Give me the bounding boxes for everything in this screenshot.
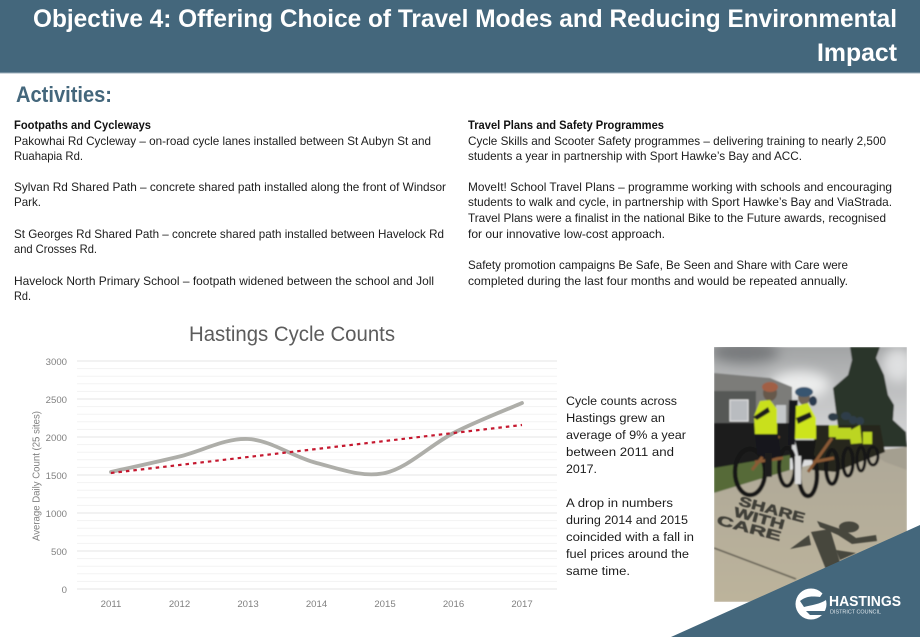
logo wordmark: DISTRICT COUNCIL — [830, 610, 881, 616]
text block: cycle count commentary: A drop in numbers — [566, 496, 673, 510]
y axis labels: 1000 — [46, 509, 67, 520]
tree — [833, 347, 907, 447]
y axis labels: 2000 — [46, 433, 67, 444]
text block: footpaths and cycleways: Rd. — [14, 290, 31, 303]
road marking: share with care — [717, 496, 806, 542]
x axis labels: 2012 — [169, 599, 190, 610]
heading: activities: Activities: — [16, 82, 112, 107]
icon: Hastings logo mark — [796, 588, 827, 620]
header banner — [0, 0, 920, 74]
road marking: share with care: WITH — [732, 504, 786, 532]
text block: travel plans and safety programmes: Travel Plans and Safety Programmes — [468, 119, 664, 132]
text block: footpaths and cycleways: Sylvan Rd Shared Path – concrete shared path installed along the front of Windsor — [14, 181, 446, 194]
text block: footpaths and cycleways: and Crosses Rd. — [14, 243, 97, 256]
text block: cycle count commentary: average of 9% a year — [566, 428, 686, 442]
title: Objective 4: Offering Choice of Travel Modes and Reducing Environmental — [33, 5, 897, 33]
x axis labels: 2015 — [374, 599, 396, 610]
y axis title: Average Daily Count (25 sites) — [32, 411, 42, 541]
y axis labels — [46, 357, 67, 596]
x axis labels: 2016 — [443, 599, 464, 610]
text block: footpaths and cycleways: Pakowhai Rd Cycleway – on-road cycle lanes installed between St Aubyn St and — [14, 135, 431, 148]
title — [33, 5, 898, 67]
y axis labels: 1500 — [46, 471, 67, 482]
text block: cycle count commentary: during 2014 and 2015 — [566, 513, 688, 527]
bikes — [735, 447, 878, 496]
road marking: cyclist symbol — [790, 521, 877, 572]
text block: travel plans and safety programmes: Safety promotion campaigns Be Safe, Be Seen and Share with Care were — [468, 259, 848, 272]
y axis labels: 3000 — [46, 357, 67, 368]
text block: cycle count commentary — [566, 394, 694, 578]
text block: footpaths and cycleways: Footpaths and Cycleways — [14, 119, 151, 132]
text block: travel plans and safety programmes: students a year in partnership with Sport Hawke’s Bay and ACC. — [468, 150, 802, 163]
text block: cycle count commentary: same time. — [566, 564, 630, 578]
corner triangle with logo — [671, 525, 920, 637]
text block: travel plans and safety programmes: completed during the last four months and would be repeated annually. — [468, 275, 848, 288]
text block: cycle count commentary: between 2011 and — [566, 445, 674, 459]
text block: travel plans and safety programmes: MoveIt! School Travel Plans – programme working with schools and encouraging — [468, 181, 892, 194]
line chart: Hastings cycle counts — [32, 323, 557, 610]
text block: cycle count commentary: Hastings grew an — [566, 411, 665, 425]
title: Impact — [817, 39, 898, 67]
text block: footpaths and cycleways: St Georges Rd Shared Path – concrete shared path installed between Havelock Rd — [14, 228, 444, 241]
chart title: Hastings Cycle Counts — [189, 323, 395, 346]
text block: travel plans and safety programmes: Cycle Skills and Scooter Safety programmes – delivering training to nearly 2,500 — [468, 135, 886, 148]
students — [760, 434, 780, 460]
text block: footpaths and cycleways — [14, 119, 446, 303]
distant students — [829, 425, 872, 444]
text block: footpaths and cycleways: Ruahapia Rd. — [14, 150, 83, 163]
road marking: share with care: CARE — [715, 512, 783, 544]
text block: footpaths and cycleways: Park. — [14, 196, 41, 209]
photo: students with bikes on shared path — [711, 341, 914, 602]
road marking: share with care: SHARE — [737, 493, 807, 525]
text block: footpaths and cycleways: Havelock North Primary School – footpath widened between the school and Joll — [14, 275, 434, 288]
clouds — [711, 341, 914, 399]
text block: travel plans and safety programmes: students to walk and cycle, in partnership with Sport Hawke’s Bay and ViaStrada. — [468, 196, 892, 209]
text block: travel plans and safety programmes — [468, 119, 892, 288]
trend line — [111, 425, 522, 473]
x axis labels: 2014 — [306, 599, 328, 610]
logo wordmark: HASTINGS — [829, 594, 901, 610]
y axis labels: 500 — [51, 547, 67, 558]
text block: cycle count commentary: coincided with a fall in — [566, 530, 694, 544]
text block: cycle count commentary: 2017. — [566, 462, 597, 476]
text block: cycle count commentary: Cycle counts across — [566, 394, 677, 408]
x axis labels — [101, 599, 533, 610]
cycle count line — [111, 403, 522, 474]
x axis labels: 2013 — [237, 599, 259, 610]
text block: travel plans and safety programmes: Travel Plans were a finalist in the national Bike to the Future awards, recognised — [468, 212, 886, 225]
y axis labels: 2500 — [46, 395, 67, 406]
text block: travel plans and safety programmes: for our innovative low-cost approach. — [468, 228, 665, 241]
x axis labels: 2017 — [511, 599, 533, 610]
y axis labels: 0 — [62, 585, 67, 596]
text block: cycle count commentary: fuel prices around the — [566, 547, 689, 561]
x axis labels: 2011 — [101, 599, 121, 610]
